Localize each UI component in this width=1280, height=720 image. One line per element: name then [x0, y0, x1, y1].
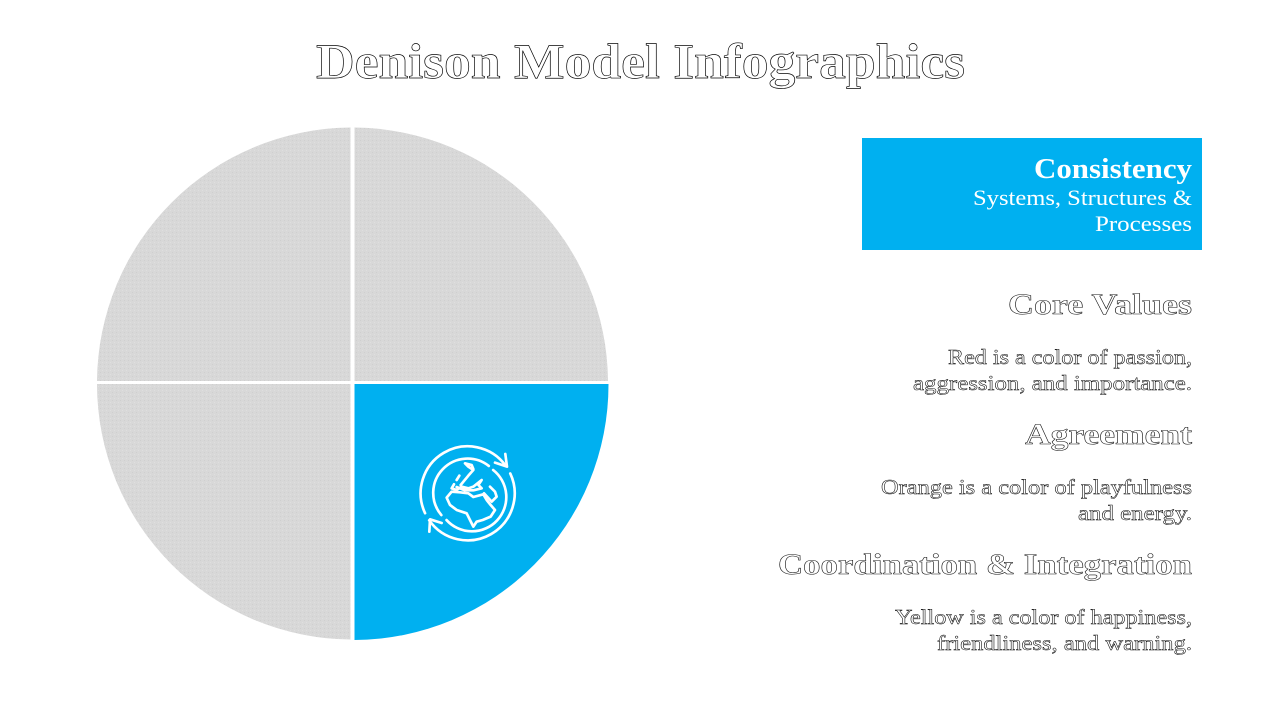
- callout text line 2: Processes: [1095, 211, 1192, 236]
- text block: Agreement: [881, 418, 1192, 525]
- callout: Consistency: [862, 138, 1202, 250]
- text block: Core Values: Red is a color of passion,: [948, 345, 1192, 369]
- pie segment: top right: [354, 128, 608, 381]
- text block: Core Values: aggression, and importance.: [913, 371, 1192, 395]
- text block: Core Values: Core Values: [1008, 288, 1192, 321]
- text block: Coordination & Integration: friendliness, and warning.: [937, 631, 1192, 655]
- text block: Agreement: Agreement: [1025, 418, 1192, 451]
- text block: Agreement: and energy.: [1078, 501, 1192, 525]
- text block: Agreement: Orange is a color of playfulness: [881, 475, 1192, 499]
- text block: Coordination & Integration: Yellow is a color of happiness,: [895, 605, 1192, 629]
- icon: globe with circular arrows: [421, 446, 515, 540]
- title: Denison Model Infographics: [316, 33, 965, 89]
- callout heading: Consistency: [1034, 154, 1192, 185]
- pie segment: bottom right highlighted: [354, 384, 609, 640]
- text block: Core Values: [913, 288, 1192, 395]
- callout text: Systems, Structures &: [973, 185, 1193, 210]
- text block: Coordination & Integration: Coordination & Integration: [778, 548, 1192, 581]
- pie segment: top left: [97, 128, 350, 381]
- text block: Coordination & Integration: [778, 548, 1192, 655]
- pie segment: bottom left: [97, 384, 350, 640]
- pie chart: [97, 128, 609, 640]
